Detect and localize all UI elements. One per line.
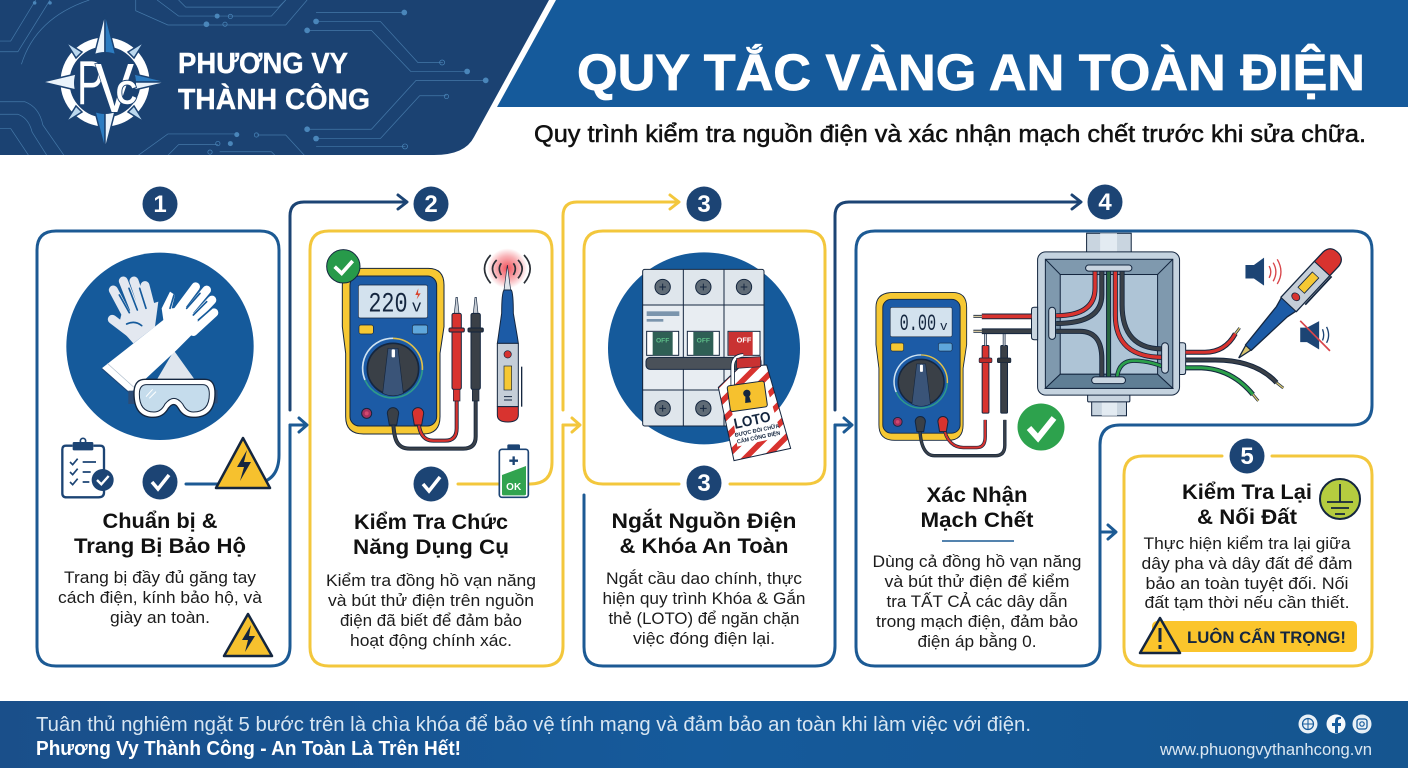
illustration: circuit breaker with LOTO: LOTO bbox=[732, 409, 772, 433]
body 5: dây pha và dây đất để đảm bbox=[1142, 555, 1352, 573]
title banner bbox=[497, 0, 1408, 107]
circuit pattern bbox=[0, 0, 489, 166]
illustration: junction box bbox=[973, 233, 1283, 416]
number badge 3 top: 3 bbox=[697, 191, 711, 218]
body 2: hoạt động chính xác. bbox=[350, 632, 512, 650]
body 2: điện đã biết để đảm bảo bbox=[340, 612, 522, 630]
body 4: điện áp bằng 0. bbox=[918, 632, 1036, 651]
body 4 bbox=[872, 553, 1082, 651]
icon: battery OK: OK bbox=[506, 482, 522, 493]
heading 2: Năng Dụng Cụ bbox=[353, 536, 509, 559]
illustration: circuit breaker with LOTO: ĐƯỢC ĐÓI CHỮA bbox=[734, 422, 780, 439]
brand name bbox=[178, 48, 370, 116]
body 4: tra TẤT CẢ các dây dẫn bbox=[886, 592, 1068, 611]
icon: small warning bbox=[224, 614, 272, 656]
logo: compass PVC: C bbox=[116, 74, 137, 111]
icon: ground symbol bbox=[1320, 479, 1360, 519]
panel 4: xác nhận mạch chết bbox=[856, 184, 1372, 666]
illustration: multimeter 0.00V bbox=[876, 292, 1011, 456]
panel 5: kiểm tra lại bbox=[1124, 438, 1372, 666]
body 4: Dùng cả đồng hồ vạn năng bbox=[872, 553, 1082, 571]
illustration: tester pen and sound icons bbox=[1231, 245, 1346, 366]
body 4: trong mạch điện, đảm bảo bbox=[876, 613, 1078, 631]
number badge 2 bbox=[414, 186, 448, 222]
body 3: việc đóng điện lại. bbox=[633, 630, 775, 648]
panel 5 outline bbox=[1124, 456, 1372, 666]
icon: clipboard checklist bbox=[62, 438, 114, 497]
illustration: circuit breaker with LOTO: OFF bbox=[656, 338, 669, 345]
number badge 3 top bbox=[686, 186, 722, 222]
footer message: Tuân thủ nghiêm ngặt 5 bước trên là chìa khóa để bảo vệ tính mạng và đảm bảo an toàn khi làm việc với điện. bbox=[36, 714, 1031, 736]
heading 4 bbox=[920, 484, 1034, 532]
number badge 1 bbox=[142, 186, 178, 222]
body 3: thẻ (LOTO) để ngăn chặn bbox=[608, 610, 800, 628]
subtitle: Quy trình kiểm tra nguồn điện và xác nhận mạch chết trước khi sửa chữa. bbox=[534, 121, 1366, 148]
number badge 3 bottom: 3 bbox=[697, 470, 711, 497]
illustration: multimeter 0.00V: 0.00 bbox=[900, 311, 936, 337]
number badge 5 bbox=[1230, 438, 1264, 474]
illustration: multimeter 0.00V: v bbox=[940, 319, 948, 334]
number badge 4: 4 bbox=[1098, 189, 1112, 216]
heading 1: Chuẩn bị & bbox=[102, 510, 218, 533]
number badge 1: 1 bbox=[153, 191, 167, 218]
body 1: Trang bị đầy đủ găng tay bbox=[64, 569, 257, 587]
panel 2: kiểm tra dụng cụ bbox=[310, 186, 563, 666]
body 5: đất tạm thời nếu cần thiết. bbox=[1144, 594, 1350, 612]
icon: battery OK bbox=[499, 444, 528, 497]
panel 3: ngắt nguồn bbox=[584, 186, 835, 666]
footer slogan: Phương Vy Thành Công - An Toàn Là Trên Hết! bbox=[36, 738, 461, 760]
header: logo band bbox=[0, 0, 549, 166]
body 1: giày an toàn. bbox=[110, 609, 210, 627]
heading 5: Kiểm Tra Lại bbox=[1182, 481, 1312, 504]
arrow to panel 5 bbox=[1100, 525, 1116, 539]
illustration: circuit breaker with LOTO: CẤM CÔNG ĐIỆN bbox=[736, 429, 781, 446]
illustration: voltage tester pen bbox=[484, 248, 530, 422]
panel 3 outline bbox=[584, 231, 825, 484]
body 5: bảo an toàn tuyệt đối. Nối bbox=[1146, 575, 1348, 593]
body 3: hiện quy trình Khóa & Gắn bbox=[602, 589, 806, 608]
body 1: cách điện, kính bảo hộ, và bbox=[58, 589, 263, 607]
number badge 5: 5 bbox=[1240, 443, 1254, 470]
body 5: Thực hiện kiểm tra lại giữa bbox=[1144, 535, 1351, 553]
brand name: THÀNH CÔNG bbox=[178, 82, 370, 116]
icon: check badge bbox=[414, 466, 448, 502]
callout: luôn cẩn trọng: LUÔN CẨN TRỌNG! bbox=[1187, 628, 1346, 647]
connector 3 to 4 bbox=[835, 195, 1081, 432]
illustration: multimeter 220V: v bbox=[412, 298, 422, 317]
body 4: và bút thử điện để kiểm bbox=[884, 573, 1070, 591]
heading 3 bbox=[612, 509, 796, 558]
heading 5: & Nối Đất bbox=[1197, 506, 1297, 529]
panel 2 outline bbox=[310, 231, 563, 666]
icon: green check bbox=[1018, 404, 1064, 450]
body 3: Ngắt cầu dao chính, thực bbox=[606, 569, 802, 588]
body 2 bbox=[326, 572, 536, 650]
panel 1: chuẩn bị bbox=[37, 186, 290, 666]
divider bbox=[942, 540, 1014, 542]
heading 4: Mạch Chết bbox=[920, 509, 1034, 532]
illustration: multimeter 220V bbox=[327, 250, 483, 449]
logo: compass PVC: V bbox=[95, 49, 134, 127]
heading 2 bbox=[353, 511, 509, 559]
connector 1 to 2 bbox=[290, 195, 407, 432]
icon: check badge bbox=[142, 464, 178, 500]
heading 5 bbox=[1182, 481, 1312, 529]
illustration: circuit breaker with LOTO: OFF bbox=[697, 338, 710, 345]
body 5 bbox=[1142, 535, 1352, 612]
panel 4 outline bbox=[856, 231, 1372, 666]
number badge 2: 2 bbox=[424, 191, 438, 218]
social icons bbox=[1298, 714, 1372, 734]
logo: compass PVC bbox=[42, 13, 168, 150]
illustration: circuit breaker with LOTO: OFF bbox=[737, 336, 752, 345]
icon: high voltage warning bbox=[216, 438, 270, 488]
heading 4: Xác Nhận bbox=[926, 484, 1028, 507]
heading 1 bbox=[74, 510, 246, 558]
connector 2 to 3 bbox=[563, 195, 679, 432]
heading 3: & Khóa An Toàn bbox=[620, 535, 788, 558]
logo: compass PVC: P bbox=[77, 49, 104, 118]
body 1 bbox=[58, 569, 263, 627]
footer band bbox=[0, 701, 1408, 768]
lower outline bbox=[584, 425, 835, 666]
heading 1: Trang Bị Bảo Hộ bbox=[74, 535, 246, 558]
number badge 3 bottom bbox=[686, 466, 722, 500]
illustration: circuit breaker with LOTO bbox=[608, 252, 803, 467]
title banner: QUY TẮC VÀNG AN TOÀN ĐIỆN bbox=[577, 43, 1365, 101]
body 2: Kiểm tra đồng hồ vạn năng bbox=[326, 572, 536, 590]
illustration: gloves and goggles bbox=[66, 253, 254, 440]
brand name: PHƯƠNG VY bbox=[178, 48, 348, 80]
panel 1 outline bbox=[37, 231, 290, 666]
body 2: và bút thử điện trên nguồn bbox=[328, 592, 534, 610]
heading 3: Ngắt Nguồn Điện bbox=[612, 509, 796, 533]
body 3 bbox=[602, 569, 806, 648]
illustration: multimeter 220V: 220 bbox=[368, 289, 408, 320]
number badge 4 bbox=[1088, 184, 1122, 220]
callout: luôn cẩn trọng bbox=[1140, 618, 1357, 653]
website: www.phuongvythanhcong.vn bbox=[1159, 741, 1372, 759]
heading 2: Kiểm Tra Chức bbox=[354, 511, 508, 534]
